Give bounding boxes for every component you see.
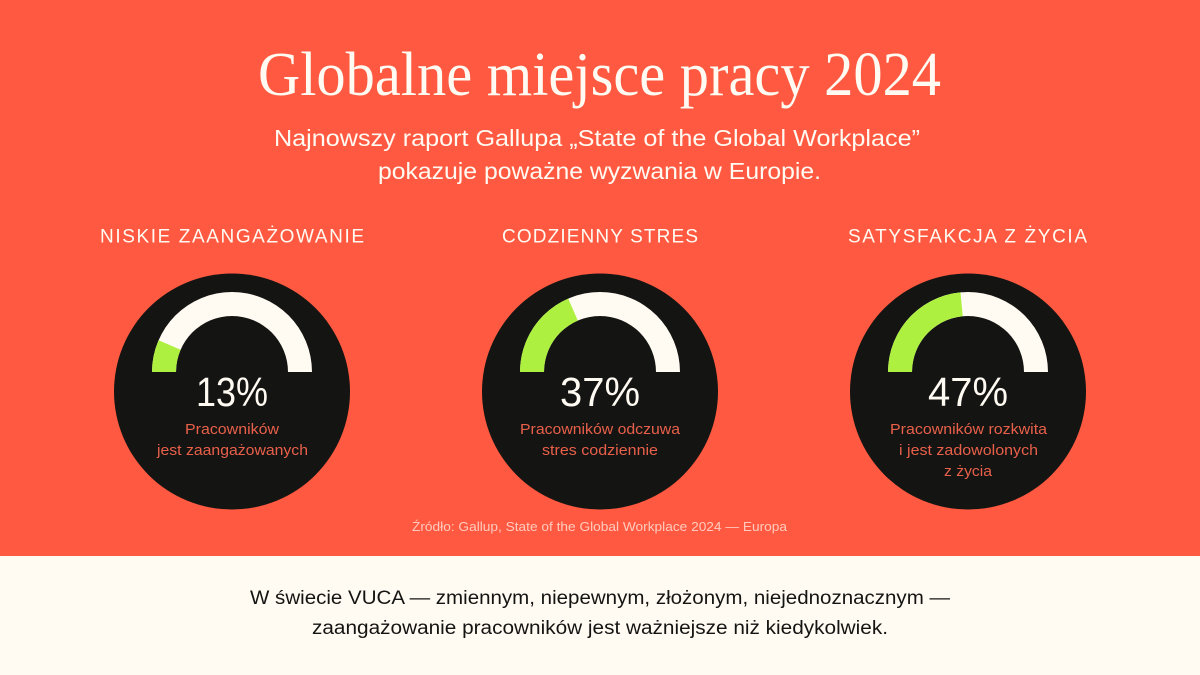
panel: codzienny stres [482,226,718,510]
gauge disc [482,274,718,510]
panel: niskie zaangażowanie [100,226,364,510]
value: 37% [560,369,640,415]
value: 13% [196,369,268,415]
description: Pracowników [185,421,279,438]
closing statement: zaangażowanie pracowników jest ważniejsze niż kiedykolwiek. [312,618,888,639]
subtitle: Najnowszy raport Gallupa „State of the Global Workplace” [274,125,920,151]
description [520,421,681,459]
heading: CODZIENNY STRES [502,226,698,248]
subtitle [274,125,920,184]
description: stres codziennie [542,442,658,459]
closing statement [250,588,950,639]
subtitle: pokazuje poważne wyzwania w Europie. [378,158,821,184]
gauge track [152,292,312,372]
description: Pracowników odczuwa [520,421,681,438]
description: z życia [944,463,993,480]
title: Globalne miejsce pracy 2024 [258,41,941,109]
heading: NISKIE ZAANGAŻOWANIE [100,226,364,248]
heading: SATYSFAKCJA Z ŻYCIA [848,226,1087,248]
gauge value 47% [888,292,963,372]
description: i jest zadowolonych [899,442,1038,459]
gauge track [520,292,680,372]
gauge disc [114,274,350,510]
description: jest zaangażowanych [156,442,308,459]
value: 47% [928,369,1008,415]
description [890,421,1048,480]
gauge track [888,292,1048,372]
gauge value 13% [152,340,181,372]
panel: satysfakcja z życia [848,226,1087,510]
gauge disc [850,274,1086,510]
description: Pracowników rozkwita [890,421,1048,438]
gauge value 37% [520,299,578,372]
source note: Źródło: Gallup, State of the Global Workplace 2024 — Europa [412,519,788,534]
description [156,421,308,459]
closing statement: W świecie VUCA — zmiennym, niepewnym, złożonym, niejednoznacznym — [250,588,950,609]
bottom band [0,556,1200,675]
